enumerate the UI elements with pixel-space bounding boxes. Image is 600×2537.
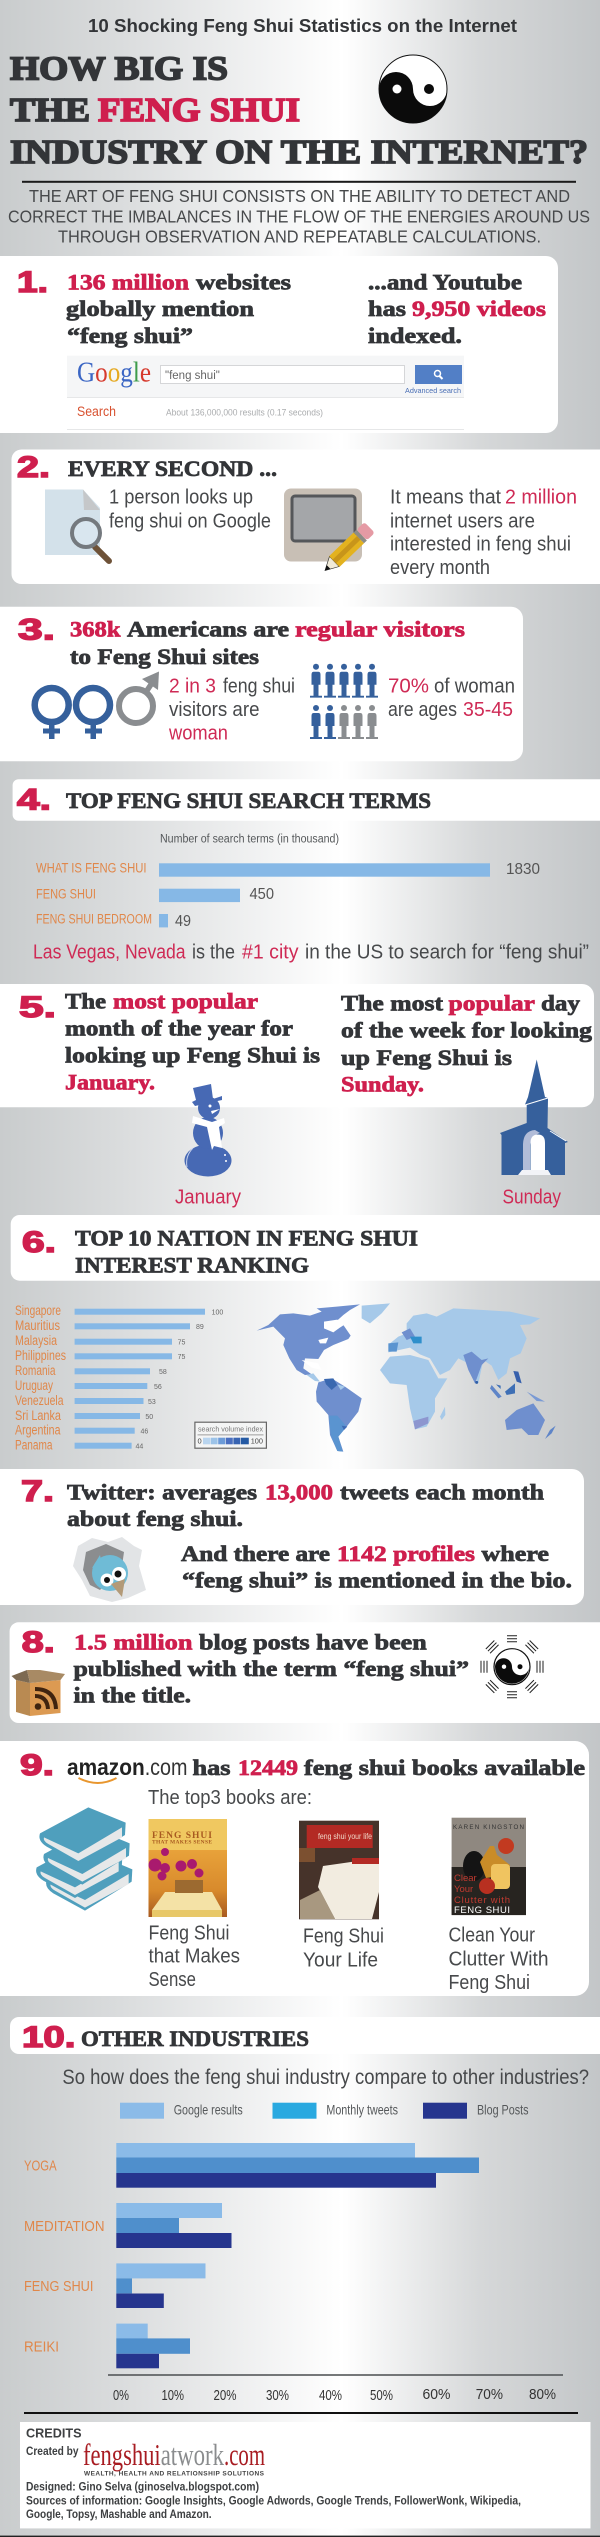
bar chart: countries: Sri Lanka — [15, 1408, 61, 1423]
number 2: 2. — [17, 451, 50, 484]
bar chart: industries: 30% — [266, 2388, 289, 2404]
panel: stat 3 — [0, 607, 523, 761]
bar chart: industries: 10% — [162, 2388, 184, 2404]
bar chart: countries: 89 — [196, 1324, 204, 1331]
heading — [75, 1226, 418, 1277]
text: profiles: 1142 profiles — [337, 1541, 476, 1566]
heading: regular visitors — [295, 617, 466, 642]
icon: tablet and pencil — [284, 488, 375, 576]
bar chart: industries: 50% — [370, 2388, 393, 2404]
legend: search volume index: 100 — [251, 1436, 263, 1446]
google search screenshot — [67, 356, 464, 430]
amazon logo: amazon — [67, 1754, 145, 1780]
bar chart: countries: Singapore — [15, 1303, 61, 1318]
heading: INTEREST RANKING — [75, 1252, 309, 1277]
text: 2 in 3 — [168, 676, 295, 744]
stat 1 left text: globally mention — [66, 296, 254, 321]
text: 70%: of woman — [434, 676, 515, 698]
bar chart: search terms: FENG SHUI — [36, 886, 96, 901]
title: HOW BIG IS — [10, 50, 228, 88]
text: 1 person: 1 person looks up — [109, 486, 253, 508]
text: tweets: Twitter: averages — [67, 1479, 258, 1504]
bar chart: search terms: 1830 — [506, 861, 540, 878]
book cover 3: Clutter with — [454, 1895, 510, 1906]
text: popular day: Sunday. — [341, 1072, 424, 1097]
text: popular month: The — [65, 988, 106, 1013]
text: tweets: 13,000 — [265, 1479, 333, 1504]
stat 1 right text: ...and Youtube — [368, 270, 522, 294]
bar chart: countries: Argentina — [15, 1422, 61, 1438]
number 1: 1. — [17, 266, 48, 299]
text: blog posts — [74, 1629, 469, 1708]
bar chart: countries: 75 — [178, 1354, 185, 1361]
chart legend: Google results — [174, 2102, 243, 2118]
text: 1 person: feng shui on Google — [109, 510, 271, 532]
text: las vegas: #1 city — [242, 941, 298, 963]
text: 2 million — [390, 486, 577, 579]
book cover 1 — [148, 1819, 227, 1917]
legend: search volume index — [195, 1422, 266, 1448]
text: top3: The top3 books are: — [148, 1787, 312, 1809]
bar chart: search terms: FENG SHUI BEDROOM — [36, 911, 152, 926]
icon: stack of books — [36, 1807, 132, 1911]
text: popular day — [341, 991, 592, 1097]
text: books available: feng shui books available — [304, 1755, 585, 1780]
bar chart: industries: REIKI — [24, 2338, 59, 2355]
panel: credits: CREDITS — [26, 2426, 82, 2441]
caption: book 1: that Makes — [148, 1946, 240, 1968]
amazon logo: .com — [145, 1754, 188, 1780]
logo: fengshuiatwork.com — [83, 2437, 265, 2477]
chart legend: Blog Posts — [477, 2102, 528, 2118]
title: FENG SHUI — [98, 92, 300, 129]
caption: book 3: Clutter With — [448, 1949, 548, 1971]
book cover 3: Clear — [454, 1873, 477, 1884]
bar chart: industries: 20% — [214, 2388, 237, 2404]
text: books available: 12449 — [238, 1755, 298, 1780]
stat 1 left text: “feng shui” — [67, 323, 193, 348]
text: profiles: where — [482, 1541, 549, 1566]
heading: EVERY SECOND ... — [68, 456, 277, 481]
bar chart: countries: Mauritius — [15, 1318, 60, 1333]
number 10: 10. — [22, 2021, 75, 2054]
panel: stat 6 heading — [11, 1215, 600, 1281]
logo: fengshuiatwork.com: .com — [224, 2437, 265, 2472]
bar chart: industries: MEDITATION — [24, 2218, 104, 2235]
logo: fengshuiatwork.com: atwork — [161, 2437, 224, 2472]
bar chart: industries: 0% — [113, 2388, 129, 2404]
chart legend: Monthly tweets — [326, 2102, 398, 2118]
caption: book 3 — [448, 1925, 548, 1994]
text: popular day: of the week for looking — [341, 1017, 592, 1042]
text: tweets: about feng shui. — [67, 1506, 243, 1531]
icon: document with magnifier — [45, 490, 109, 561]
text: popular month — [65, 988, 320, 1094]
logo: fengshuiatwork.com: fengshui — [83, 2437, 161, 2472]
text: 2 million: It means that — [390, 486, 501, 508]
bar chart: countries: 44 — [136, 1444, 143, 1450]
panel: stat 1 — [0, 256, 558, 433]
google search screenshot: Search — [77, 404, 116, 419]
bar chart: countries: Panama — [15, 1438, 53, 1452]
book cover 1: FENG SHUI — [152, 1831, 212, 1841]
number 7: 7. — [21, 1475, 54, 1508]
title: THE — [10, 92, 90, 129]
text: 70%: 70% — [388, 676, 429, 698]
icon: snowman — [184, 1084, 232, 1176]
caption: book 3: Feng Shui — [448, 1972, 530, 1994]
text: 2 million: internet users are — [390, 510, 535, 532]
logo: fengshuiatwork.com: WEALTH, HEALTH AND RELATIONSHIP SOLUTIONS — [84, 2470, 265, 2477]
text: tweets — [67, 1479, 544, 1531]
caption: book 2: Your Life — [303, 1950, 378, 1972]
text: popular month: January. — [65, 1069, 155, 1094]
google search screenshot: Google — [77, 356, 151, 388]
caption: book 2 — [303, 1926, 384, 1972]
book cover 3: Your — [454, 1884, 473, 1895]
bar chart: industries: 60% — [422, 2387, 451, 2403]
stat 1 right text: indexed. — [368, 323, 462, 348]
caption: book 1 — [148, 1922, 240, 1991]
text: books available — [192, 1755, 585, 1780]
bar chart: countries: Romania — [15, 1363, 56, 1378]
text: books available: has — [192, 1755, 231, 1780]
text: 2 in 3: feng shui — [223, 676, 295, 698]
panel: credits: Designed: Gino Selva (ginoselva.blogspot.com) — [26, 2482, 259, 2494]
caption: book 1: Sense — [148, 1969, 196, 1991]
bar chart: countries: 50 — [145, 1414, 153, 1421]
panel: stat 5 — [0, 984, 594, 1107]
world map — [257, 1303, 556, 1452]
text: blog posts: in the title. — [74, 1683, 191, 1708]
icon: yin yang — [379, 55, 447, 123]
book cover 2 — [299, 1821, 379, 1919]
text: popular day: up Feng Shui is — [341, 1045, 513, 1070]
text: popular month: looking up Feng Shui is — [65, 1042, 320, 1067]
icon: rss box — [12, 1670, 65, 1716]
text: 2 in 3: 2 in 3 — [169, 676, 216, 698]
bar chart: industries: 80% — [529, 2387, 556, 2403]
text: popular month: month of the year for — [65, 1016, 293, 1041]
text: 70% — [388, 676, 515, 721]
text: 2 million: every month — [390, 557, 490, 579]
book cover 2: feng shui your life — [318, 1832, 372, 1841]
stat 1 right text: 9,950 videos — [412, 296, 547, 321]
bar chart: industries: FENG SHUI — [24, 2278, 93, 2295]
book cover 3 — [452, 1818, 526, 1916]
panel: credits: Google, Topsy, Mashable and Amazon. — [26, 2509, 212, 2521]
icon: gender symbols — [35, 672, 159, 739]
panel: stat 8 — [10, 1622, 600, 1723]
text: las vegas — [33, 941, 589, 963]
bar chart: search terms: Number of search terms (in thousand) — [160, 834, 339, 846]
bar chart: countries: Uruguay — [15, 1378, 53, 1393]
stat 1 right text — [368, 270, 547, 348]
intro text: THE ART OF FENG SHUI CONSISTS ON THE ABILITY TO DETECT AND — [29, 186, 570, 206]
bar chart: countries: 46 — [140, 1428, 148, 1436]
text: 70%: are ages — [388, 699, 457, 721]
bar chart: industries — [24, 2143, 563, 2404]
heading: Americans are — [127, 617, 289, 642]
panel: credits: Sources of information: Google Insights, Google Adwords, Google Trends, FollowerWonk, Wikipedia, — [26, 2496, 521, 2508]
icon: twitter bird — [73, 1537, 146, 1602]
amazon logo — [67, 1754, 188, 1783]
bar chart: countries: 53 — [148, 1399, 156, 1406]
text: las vegas: in the US to search for “feng shui” — [305, 941, 589, 963]
text: profiles: And there are — [181, 1541, 330, 1566]
icon: bagua — [481, 1636, 543, 1698]
google search screenshot: About 136,000,000 results (0.17 seconds) — [166, 408, 323, 418]
text: popular day: The most — [341, 991, 444, 1016]
number 3: 3. — [18, 614, 55, 646]
title — [10, 50, 588, 171]
text: las vegas: is the — [192, 941, 235, 963]
text: blog posts: 1.5 million — [74, 1629, 192, 1654]
book cover 1: THAT MAKES SENSE — [152, 1840, 212, 1846]
text: las vegas: Las Vegas, Nevada — [33, 941, 186, 963]
text: popular month: most popular — [113, 988, 258, 1013]
number 4: 4. — [17, 784, 51, 816]
stat 1 left text: websites — [196, 270, 292, 294]
panel: credits — [20, 2422, 590, 2528]
legend: search volume index: 0 — [198, 1436, 202, 1446]
caption: book 1: Feng Shui — [148, 1922, 230, 1944]
panel: stat 2 — [12, 450, 600, 584]
title: INDUSTRY ON THE INTERNET? — [10, 134, 588, 171]
bar chart: countries: Malaysia — [15, 1333, 57, 1348]
google search screenshot: Advanced search — [405, 386, 461, 395]
text: profiles: “feng shui” is mentioned in the bio. — [182, 1568, 572, 1593]
heading: OTHER INDUSTRIES — [81, 2026, 309, 2051]
heading: TOP 10 NATION IN FENG SHUI — [75, 1226, 418, 1251]
text: popular day: day — [541, 991, 580, 1016]
number 9: 9. — [20, 1749, 54, 1782]
number 8: 8. — [22, 1626, 55, 1659]
number 6: 6. — [22, 1226, 56, 1259]
panel: credits: Created by — [26, 2446, 79, 2458]
subtitle: 10 Shocking Feng Shui Statistics on the Internet — [88, 16, 517, 36]
bar chart: search terms: 450 — [250, 886, 274, 903]
book cover 3: FENG SHUI — [454, 1905, 510, 1916]
heading: TOP FENG SHUI SEARCH TERMS — [66, 788, 431, 813]
stat 1 right text: has — [368, 296, 407, 321]
bar chart: countries: Venezuela — [15, 1393, 64, 1408]
bar chart: countries — [15, 1303, 223, 1452]
bar chart: countries: 75 — [178, 1340, 185, 1346]
text: tweets: tweets each month — [340, 1479, 544, 1504]
text: 2 in 3: visitors are — [169, 699, 260, 721]
text: blog posts: blog posts have been — [199, 1629, 427, 1654]
book cover 3: KAREN KINGSTON — [453, 1824, 524, 1831]
intro text: THROUGH OBSERVATION AND REPEATABLE CALCULATIONS. — [58, 226, 541, 246]
text: 70%: 35-45 — [463, 699, 513, 721]
legend: search volume index: search volume index — [198, 1425, 263, 1434]
bar chart: search terms: 49 — [175, 913, 191, 930]
text: profiles — [181, 1541, 572, 1593]
number 5: 5. — [19, 991, 56, 1024]
text: popular day: popular — [448, 991, 535, 1016]
bar chart: industries: 70% — [476, 2387, 503, 2403]
caption: book 2: Feng Shui — [303, 1926, 384, 1948]
panel: stat 10 heading — [10, 2017, 600, 2054]
panel: stat 7 — [0, 1469, 584, 1605]
bar chart: industries: YOGA — [24, 2158, 57, 2174]
stat 1 left text: 136 million — [67, 270, 189, 294]
bar chart: search terms — [36, 834, 540, 930]
bar chart: search terms: WHAT IS FENG SHUI — [36, 861, 146, 876]
stat 1 left text — [66, 270, 292, 348]
heading — [70, 617, 466, 669]
heading: 368k — [70, 617, 121, 642]
icon: church — [500, 1060, 568, 1175]
bar chart: countries: 56 — [154, 1384, 162, 1391]
text: 2 million: 2 million — [505, 486, 577, 508]
text: 1 person — [109, 486, 271, 532]
bar chart: countries: 100 — [212, 1310, 223, 1316]
chart legend — [120, 2102, 528, 2119]
google search screenshot: "feng shui" — [165, 370, 220, 382]
heading: to Feng Shui sites — [70, 644, 259, 669]
bar chart: countries: 58 — [159, 1369, 167, 1376]
text: 2 million: interested in feng shui — [390, 534, 571, 556]
bar chart: industries: 40% — [319, 2388, 342, 2404]
label: Sunday: Sunday — [502, 1186, 561, 1208]
label: January: January — [175, 1186, 241, 1208]
caption: book 3: Clean Your — [448, 1925, 535, 1947]
text: 2 in 3: woman — [168, 722, 228, 744]
panel: stat 4 heading — [13, 779, 600, 821]
text: blog posts: published with the term “feng shui” — [74, 1656, 469, 1681]
intro text — [8, 186, 590, 246]
icon: people grid — [310, 664, 378, 739]
bar chart: countries: Philippines — [15, 1348, 66, 1363]
panel: stat 9 — [0, 1741, 589, 1996]
